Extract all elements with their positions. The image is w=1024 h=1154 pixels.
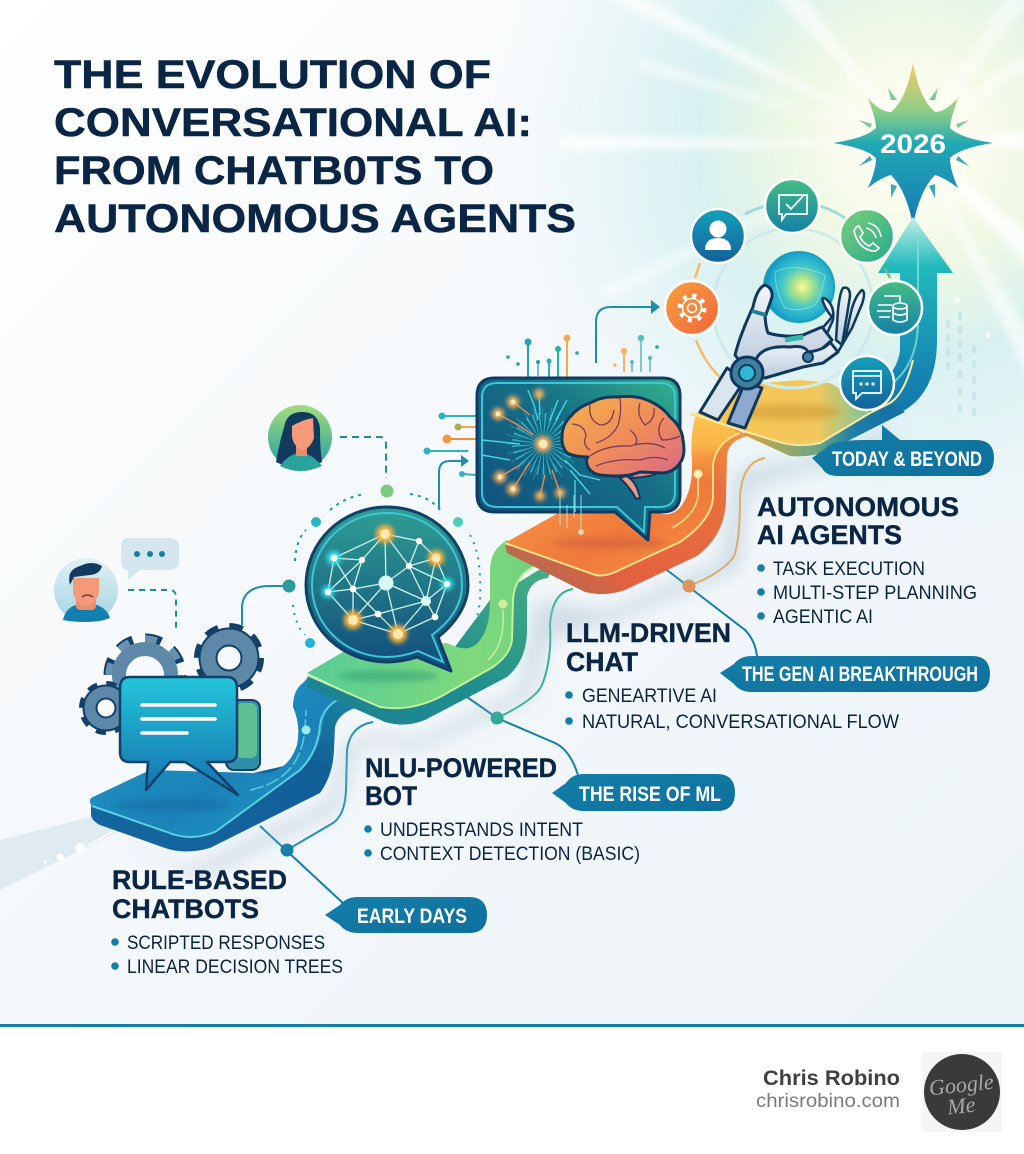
footer logo	[922, 1052, 1002, 1132]
footer author	[756, 1067, 900, 1112]
text block: rule-based chatbots	[111, 865, 343, 978]
footer author: chrisrobino.com	[756, 1091, 900, 1112]
neural network bubble	[306, 507, 468, 671]
icon: message circle	[840, 356, 894, 410]
text block: nlu-powered bot	[364, 753, 640, 865]
ribbon: stage 4 platform	[690, 360, 913, 456]
tag: today and beyond	[812, 425, 994, 476]
footer panel	[0, 1024, 1024, 1154]
icon: chat check circle	[765, 179, 819, 233]
text block: nlu-powered bot: NLU-POWERED	[365, 753, 557, 783]
2026 star burst: 2026	[880, 129, 946, 159]
text block: autonomous ai agents: AUTONOMOUS	[757, 492, 959, 522]
text block: autonomous ai agents	[757, 492, 977, 628]
ribbon: stage 1 riser and base	[90, 675, 355, 852]
icon: phone circle	[840, 209, 894, 263]
chat bubble stage 1	[120, 677, 260, 795]
footer logo: Me	[945, 1092, 977, 1120]
circuit lines feeding brain bubble	[424, 334, 659, 477]
text block: rule-based chatbots: SCRIPTED RESPONSES	[127, 933, 325, 954]
decorative light band with dots	[0, 812, 130, 890]
text block: autonomous ai agents: TASK EXECUTION	[773, 559, 925, 580]
text block: nlu-powered bot: CONTEXT DETECTION (BASIC)	[380, 844, 640, 865]
ribbon: stage 2 riser and platform	[307, 540, 555, 725]
icon: gears	[84, 630, 257, 730]
dashed connector from female user	[340, 437, 386, 478]
robotic hand	[700, 285, 864, 428]
data pixel columns	[946, 297, 991, 416]
tag: early days	[325, 897, 487, 933]
tag: the rise of ml: THE RISE OF ML	[579, 783, 721, 806]
icon: person circle	[691, 209, 745, 263]
text block: rule-based chatbots: LINEAR DECISION TREES	[127, 957, 343, 978]
orbit rings	[695, 205, 890, 388]
title	[54, 53, 576, 241]
title: FROM CHATB0TS TO	[54, 149, 494, 193]
text block: autonomous ai agents: AI AGENTS	[757, 520, 902, 550]
arrow from neural bubble to brain bubble	[439, 455, 469, 508]
text block: rule-based chatbots: RULE-BASED	[112, 865, 287, 895]
glowing globe	[764, 252, 834, 322]
neural burst	[482, 390, 600, 512]
2026 star burst	[833, 63, 993, 225]
footer author: Chris Robino	[763, 1067, 900, 1090]
brain illustration	[562, 396, 684, 499]
orbit dots around neural bubble	[282, 484, 480, 648]
connector nodes	[280, 580, 696, 856]
icon: database circle	[868, 281, 922, 335]
sunburst glow	[420, 0, 1024, 700]
tag: today and beyond: TODAY & BEYOND	[832, 448, 982, 471]
tag: the rise of ml	[552, 774, 735, 811]
icon: female user avatar	[268, 405, 332, 471]
title: AUTONOMOUS AGENTS	[54, 197, 576, 241]
connector lines from platforms to tags	[260, 458, 765, 905]
text block: llm-driven chat: LLM-DRIVEN	[566, 618, 731, 648]
text block: llm-driven chat: CHAT	[566, 647, 639, 677]
tag: early days: EARLY DAYS	[357, 905, 467, 928]
brain chat bubble	[477, 378, 680, 540]
title: THE EVOLUTION OF	[54, 53, 491, 97]
text block: nlu-powered bot: BOT	[365, 781, 417, 811]
arrow to agent orbit	[596, 300, 660, 363]
title: CONVERSATIONAL AI:	[54, 101, 532, 145]
ribbon shadows	[110, 425, 900, 880]
text block: llm-driven chat	[565, 618, 899, 733]
speech bubble with dots	[121, 538, 179, 580]
ribbon: stage 3 riser and platform	[505, 413, 748, 594]
text block: nlu-powered bot: UNDERSTANDS INTENT	[380, 820, 583, 841]
text block: autonomous ai agents: MULTI-STEP PLANNING	[773, 583, 977, 604]
text block: llm-driven chat: NATURAL, CONVERSATIONAL FLOW	[582, 712, 899, 733]
text block: llm-driven chat: GENEARTIVE AI	[582, 686, 717, 707]
ribbon: stage 4 arrow	[807, 217, 953, 440]
icon: gear circle	[665, 281, 719, 335]
text block: autonomous ai agents: AGENTIC AI	[773, 607, 873, 628]
connector from gears to neural bubble	[242, 586, 283, 625]
tag: the gen ai breakthrough	[720, 656, 990, 692]
text block: rule-based chatbots: CHATBOTS	[112, 894, 259, 924]
dashed connector from user	[128, 590, 176, 630]
footer logo: Google	[928, 1069, 995, 1100]
icon: male user avatar	[54, 558, 118, 622]
